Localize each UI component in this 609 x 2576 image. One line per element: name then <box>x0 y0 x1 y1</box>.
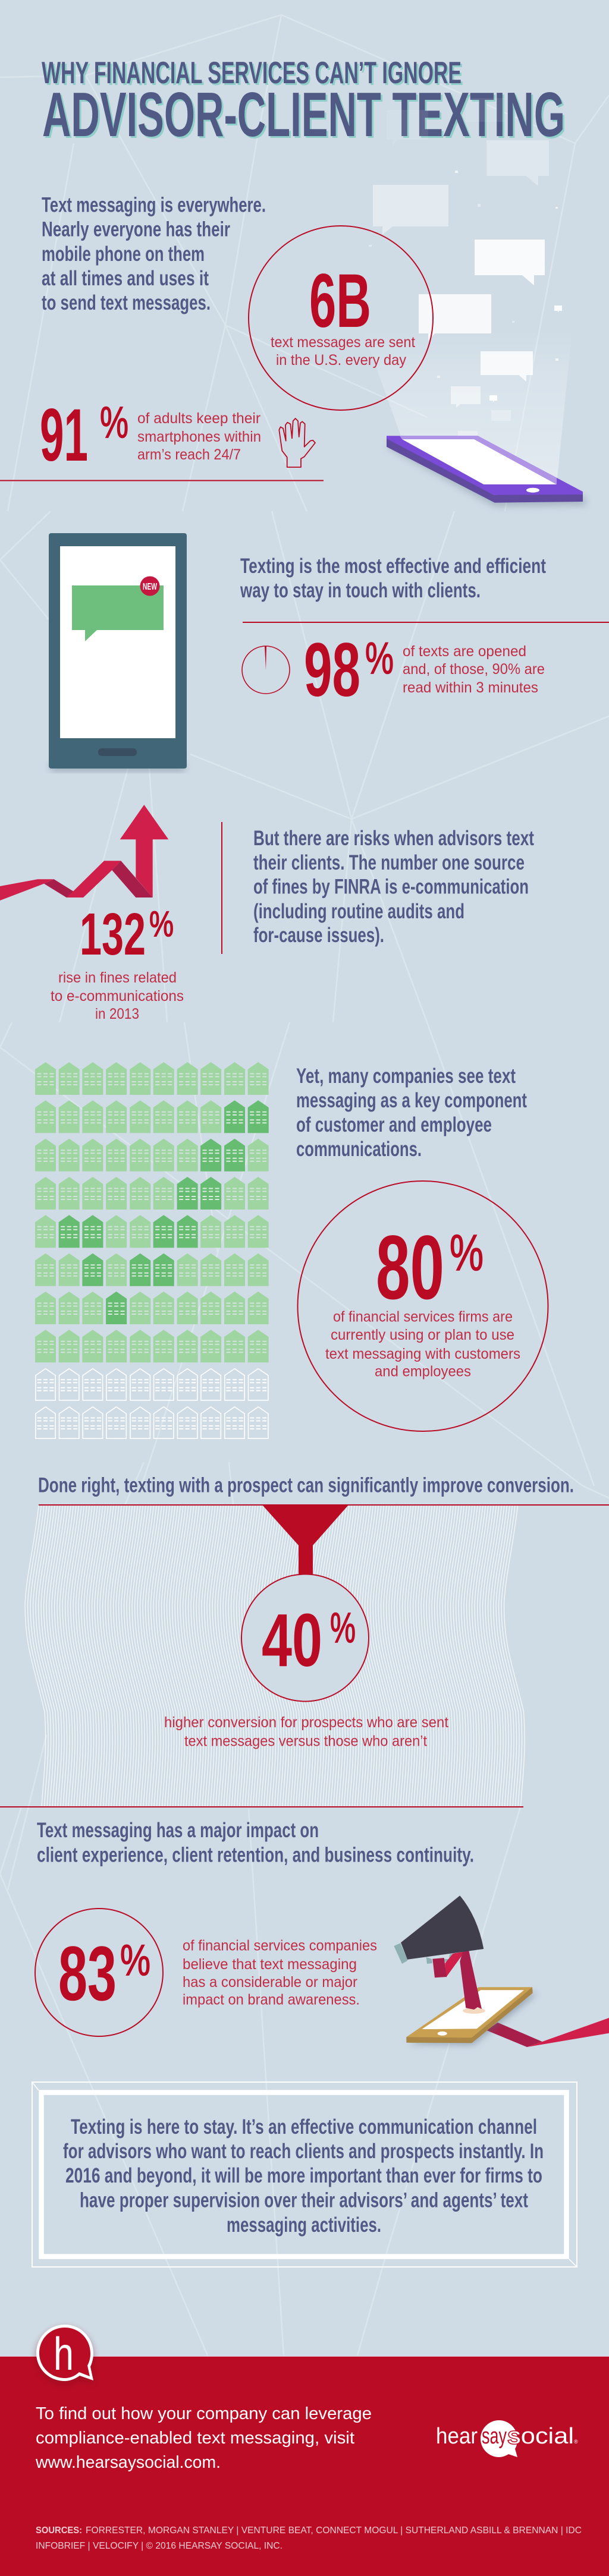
heading: most effective way: way to stay in touch with clients. <box>240 579 481 602</box>
stat: 6B in circle: in the U.S. every day <box>276 352 406 369</box>
stat: 91% <box>40 394 261 477</box>
conversion caption <box>164 1714 448 1750</box>
heading: major impact: Text messaging has a major impact on <box>37 1819 319 1842</box>
sources <box>36 2525 582 2551</box>
speech bubbles rising from phone <box>369 98 562 438</box>
companies paragraph <box>296 1065 527 1161</box>
closing statement panel <box>32 2082 577 2267</box>
footer band <box>0 2356 609 2576</box>
stat: 80% in circle: and employees <box>375 1363 471 1380</box>
stat: 40% in circle: 40 <box>262 1598 322 1682</box>
stat: 80% in circle <box>297 1181 548 1431</box>
closing statement panel: messaging activities. <box>227 2213 381 2237</box>
intro paragraph <box>42 194 266 314</box>
heading: most effective way <box>240 555 546 602</box>
icon: tablet with new message: NEW <box>143 582 158 592</box>
divider line <box>39 1504 609 1506</box>
icon: purple phone <box>387 436 586 506</box>
stat: 83% in circle <box>35 1909 163 2036</box>
brand awareness text: of financial services companies <box>183 1938 377 1954</box>
stat: 132%: rise in fines related <box>58 969 177 986</box>
icon: megaphone, hand and phone <box>394 1895 609 2047</box>
sources: FORRESTER, MORGAN STANLEY | VENTURE BEAT, CONNECT MOGUL | SUTHERLAND ASBILL & BRENNAN | IDC <box>86 2525 582 2536</box>
stat: 83% in circle: % <box>120 1936 150 1985</box>
companies paragraph: communications. <box>296 1138 422 1161</box>
icon: tablet with new message <box>49 533 187 771</box>
brand awareness text: impact on brand awareness. <box>183 1992 360 2008</box>
stat: 98%: 98 <box>304 628 360 713</box>
companies paragraph: Yet, many companies see text <box>296 1065 516 1088</box>
stat: 132% <box>51 901 184 1022</box>
stat: 91%: arm’s reach 24/7 <box>137 446 241 463</box>
stat: 132%: 132 <box>80 901 146 968</box>
intro paragraph: at all times and uses it <box>42 267 209 290</box>
sources: INFOBRIEF | VELOCIFY | © 2016 HEARSAY SOCIAL, INC. <box>36 2541 282 2551</box>
brand awareness text: has a considerable or major <box>183 1974 357 1991</box>
companies paragraph: of customer and employee <box>296 1113 492 1136</box>
stat: 91%: of adults keep their <box>137 410 260 427</box>
intro paragraph: mobile phone on them <box>42 243 205 266</box>
stat: 98%: of texts are opened <box>403 643 526 660</box>
stat: 80% in circle: % <box>450 1225 484 1281</box>
stat: 80% in circle: currently using or plan to use <box>331 1327 514 1343</box>
light beam <box>363 330 572 484</box>
logo: hearsay social wordmark: social <box>508 2424 574 2449</box>
stat: 6B in circle: 6B <box>309 259 371 344</box>
call to action: www.hearsaysocial.com. <box>35 2453 221 2472</box>
stat: 132%: to e-communications <box>51 988 184 1004</box>
vertical divider <box>221 822 222 954</box>
stat: 6B in circle: text messages are sent <box>271 334 415 351</box>
stat: 91%: % <box>100 398 128 447</box>
stat: 40% in circle: % <box>330 1605 356 1652</box>
risks paragraph <box>253 827 534 947</box>
icon: rising arrow <box>0 805 168 900</box>
logo: h speech bubble <box>36 2325 93 2384</box>
stat: 83% in circle: 83 <box>58 1930 117 2017</box>
call to action <box>35 2404 372 2472</box>
conversion caption: text messages versus those who aren’t <box>184 1733 427 1750</box>
stat: 98%: and, of those, 90% are <box>403 661 545 678</box>
stat: 40% in circle <box>241 1574 369 1701</box>
risks paragraph: (including routine audits and <box>253 900 464 923</box>
icon: hand <box>279 418 315 467</box>
call to action: compliance-enabled text messaging, visit <box>36 2429 354 2448</box>
sources: SOURCES: <box>36 2525 82 2536</box>
divider line <box>243 622 609 623</box>
stat: 80% in circle: text messaging with customers <box>325 1346 520 1362</box>
stat: 98%: read within 3 minutes <box>403 679 538 696</box>
heading: major impact: client experience, client retention, and business continuity. <box>37 1844 474 1867</box>
logo: hearsay social wordmark: say <box>482 2424 507 2449</box>
call to action: To find out how your company can leverage <box>36 2404 372 2423</box>
brand awareness text <box>183 1938 377 2008</box>
risks paragraph: for-cause issues). <box>253 924 384 947</box>
brand awareness text: believe that text messaging <box>183 1956 357 1973</box>
stat: 80% in circle: of financial services firms are <box>333 1309 513 1325</box>
logo: hearsay social wordmark: hear <box>436 2424 478 2449</box>
pictogram: grid of company buildings <box>35 1062 269 1438</box>
heading: major impact <box>37 1819 474 1867</box>
intro paragraph: Text messaging is everywhere. <box>42 194 266 216</box>
companies paragraph: messaging as a key component <box>296 1089 527 1112</box>
divider line <box>0 1806 523 1807</box>
wavy line field <box>25 1505 525 1807</box>
stat: 98%: % <box>365 633 394 683</box>
logo: hearsay social wordmark <box>436 2420 578 2457</box>
divider line <box>0 480 324 481</box>
intro paragraph: to send text messages. <box>42 291 211 314</box>
conversion caption: higher conversion for prospects who are sent <box>164 1714 448 1731</box>
stat: 98% <box>304 628 545 713</box>
icon: clock <box>242 646 290 694</box>
intro paragraph: Nearly everyone has their <box>42 218 230 241</box>
stat: 132%: in 2013 <box>95 1006 139 1022</box>
stat: 91%: smartphones within <box>137 429 261 445</box>
stat: 80% in circle: 80 <box>376 1217 444 1318</box>
logo: hearsay social wordmark: ® <box>574 2439 578 2445</box>
stat: 6B in circle <box>249 226 433 410</box>
stat: 91%: 91 <box>40 394 88 477</box>
logo: h speech bubble: h <box>54 2328 74 2380</box>
stat: 132%: % <box>149 904 174 944</box>
icon: funnel <box>262 1505 349 1575</box>
risks paragraph: their clients. The number one source <box>253 851 525 874</box>
